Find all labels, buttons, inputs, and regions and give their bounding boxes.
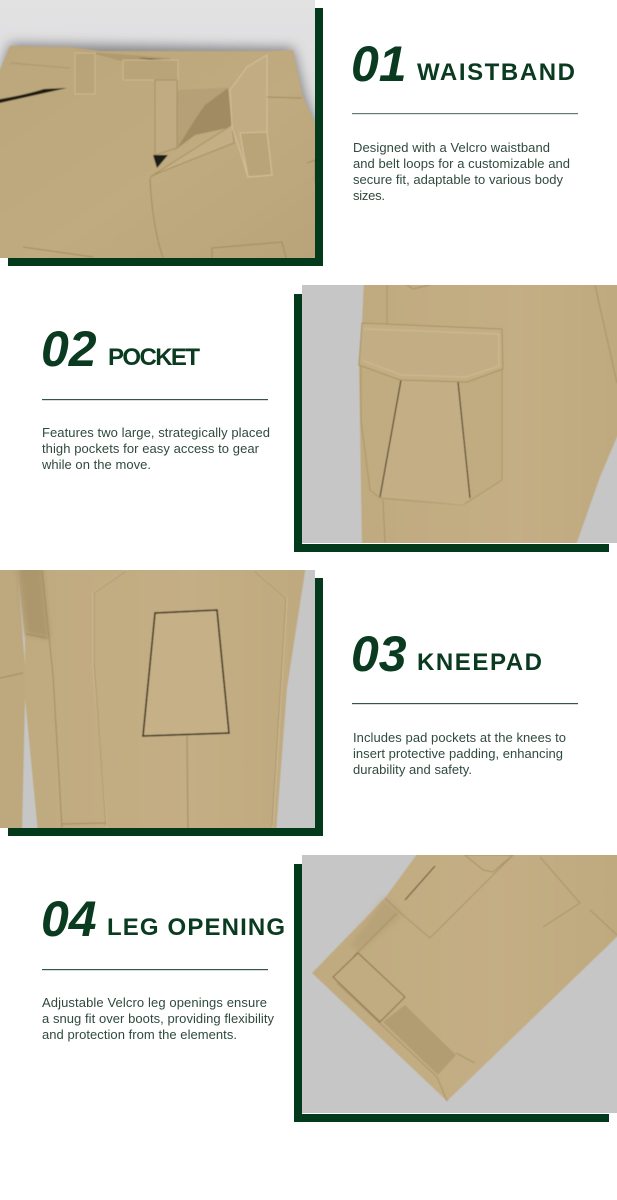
text: waistband description: sizes.: [353, 188, 385, 203]
heading: 01 waistband: WAISTBAND: [417, 59, 575, 86]
heading: 03 kneepad: [351, 626, 542, 682]
text: waistband description: Designed with a Velcro waistband: [353, 140, 550, 155]
frame: waistband green corner: [8, 8, 323, 266]
panel: pocket photo: [294, 280, 617, 552]
heading: 01 waistband: [351, 36, 575, 92]
photo: knee pad pocket close-up: [0, 565, 320, 833]
text: waistband description: [353, 140, 570, 203]
heading: 03 kneepad: KNEEPAD: [417, 649, 542, 676]
photo: velcro leg cuff close-up: [297, 850, 617, 1118]
photo: waistband close-up: [0, 0, 320, 265]
frame: kneepad green corner: [8, 578, 323, 836]
text: kneepad description: insert protective padding, enhancing: [353, 746, 563, 761]
heading: 01 waistband: 01: [351, 36, 407, 92]
text: leg opening description: [42, 995, 274, 1042]
heading: 04 leg opening: [41, 891, 285, 947]
panel: waistband photo: [0, 0, 323, 266]
heading: 02 pocket: POCKET: [108, 344, 200, 371]
text: kneepad description: [353, 730, 566, 777]
panel: kneepad photo: [0, 565, 323, 836]
text: leg opening description: a snug fit over boots, providing flexibility: [42, 1011, 274, 1026]
text: pocket description: Features two large, strategically placed: [42, 425, 270, 440]
text: waistband description: secure fit, adaptable to various body: [353, 172, 564, 187]
text: waistband description: and belt loops for a customizable and: [353, 156, 570, 171]
heading: 02 pocket: 02: [41, 321, 97, 377]
heading: 04 leg opening: LEG OPENING: [107, 914, 285, 941]
text: pocket description: [41, 425, 270, 472]
panel: leg opening photo: [294, 850, 617, 1122]
frame: pocket green corner: [294, 294, 609, 552]
heading: 04 leg opening: 04: [41, 891, 97, 947]
text: kneepad description: Includes pad pockets at the knees to: [353, 730, 566, 745]
photo: cargo pocket close-up: [297, 280, 617, 548]
text: leg opening description: and protection from the elements.: [42, 1027, 237, 1042]
heading: 02 pocket: [41, 321, 200, 377]
text: pocket description: thigh pockets for easy access to gear: [42, 441, 260, 456]
text: kneepad description: durability and safety.: [353, 762, 472, 777]
text: pocket description: while on the move.: [41, 457, 151, 472]
heading: 03 kneepad: 03: [351, 626, 407, 682]
frame: leg opening green corner: [294, 864, 609, 1122]
text: leg opening description: Adjustable Velcro leg openings ensure: [42, 995, 267, 1010]
